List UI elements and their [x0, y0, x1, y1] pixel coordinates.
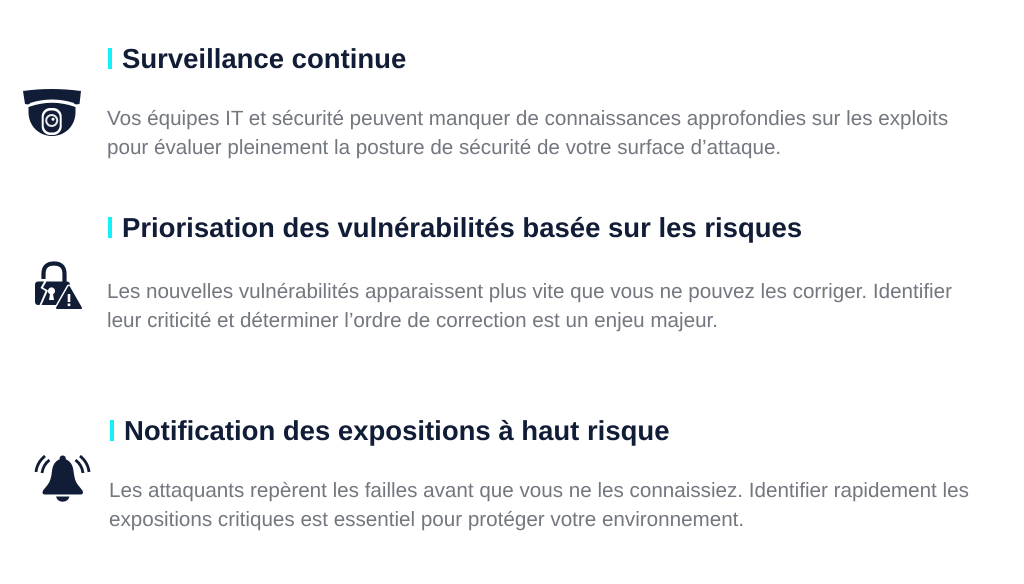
accent bar: [108, 48, 112, 69]
text block: surveillance: pour évaluer pleinement la posture de sécurité de votre surface d’attaque.: [107, 136, 781, 159]
text block: priorisation: leur criticité et déterminer l’ordre de correction est un enjeu majeur.: [107, 309, 718, 332]
text block: surveillance: [107, 107, 948, 159]
accent bar: [110, 420, 114, 441]
heading: priorisation: [108, 212, 802, 243]
heading text: Notification des expositions à haut risque: [124, 415, 670, 446]
text block: surveillance: Vos équipes IT et sécurité peuvent manquer de connaissances approfondies sur les exploits: [107, 107, 948, 130]
text block: notification: [109, 478, 969, 530]
heading: surveillance: [108, 43, 406, 74]
accent bar: [108, 217, 112, 238]
icon: dome security camera: [23, 89, 81, 136]
text block: notification: expositions critiques est essentiel pour protéger votre environnement.: [109, 508, 744, 530]
heading text: Priorisation des vulnérabilités basée sur les risques: [122, 212, 802, 243]
text block: priorisation: [107, 280, 952, 332]
icon: broken padlock with warning: [35, 261, 82, 309]
text block: notification: Les attaquants repèrent les failles avant que vous ne les connaissiez. Identifier rapidement les: [109, 478, 969, 502]
heading text: Surveillance continue: [122, 43, 406, 74]
heading: notification: [110, 415, 670, 446]
icon: ringing bell: [34, 454, 90, 502]
text block: priorisation: Les nouvelles vulnérabilités apparaissent plus vite que vous ne pouvez les corriger. Identifier: [107, 280, 952, 303]
